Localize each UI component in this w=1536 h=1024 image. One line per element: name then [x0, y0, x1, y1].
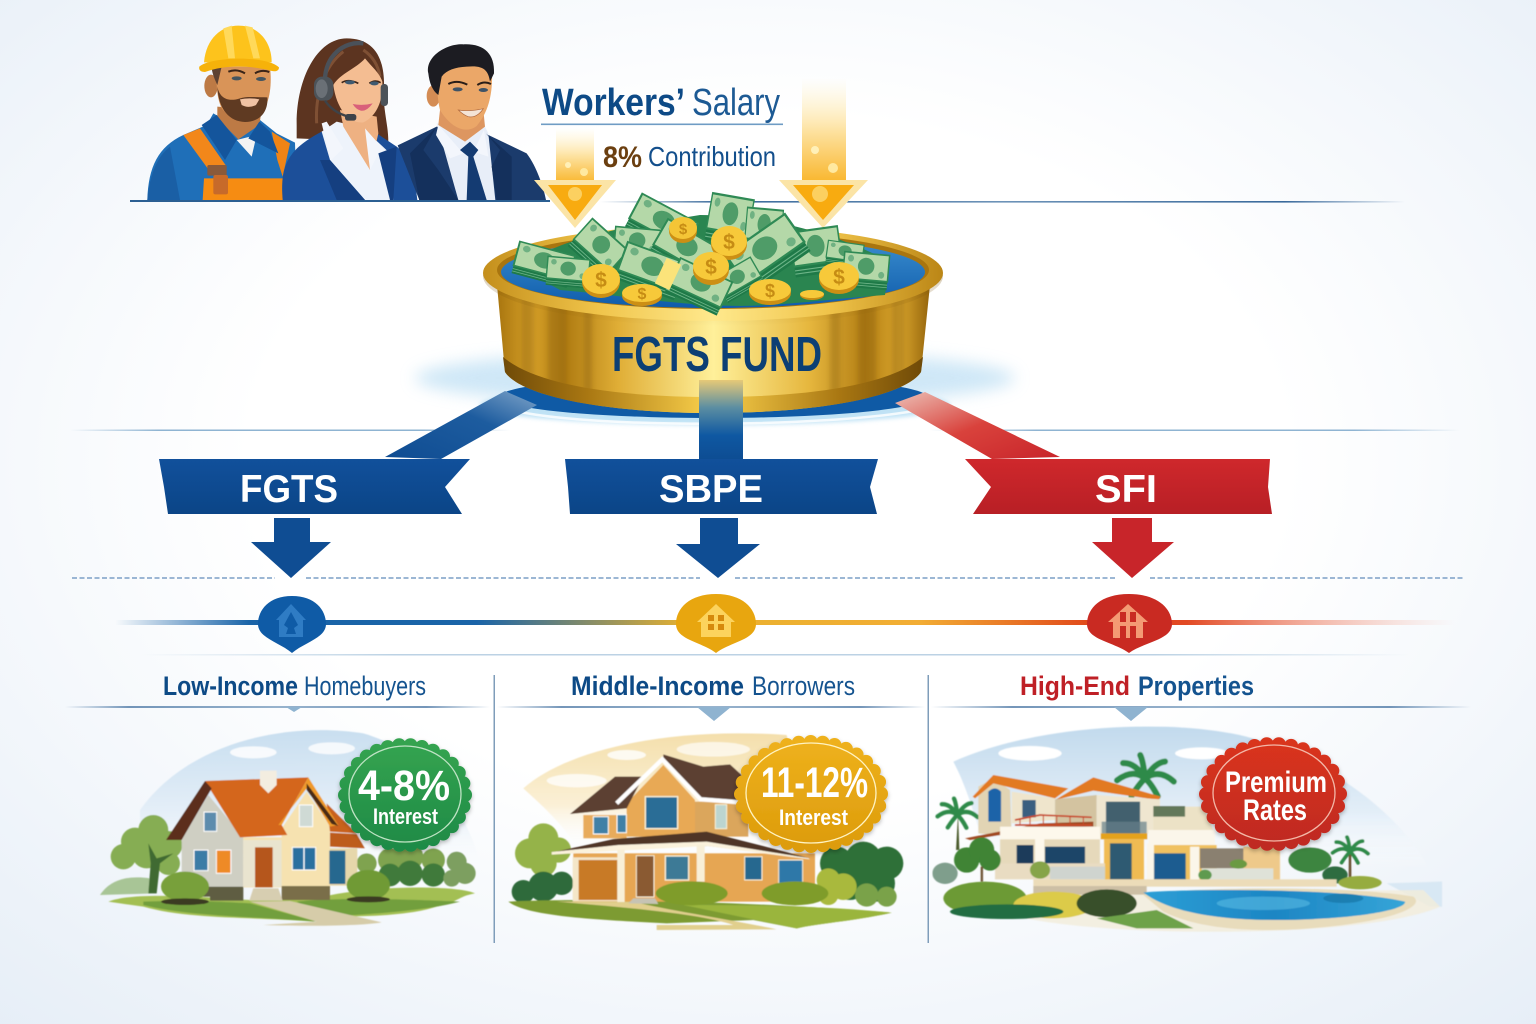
badge: premium rates: Rates — [1243, 794, 1307, 827]
money pile — [512, 193, 890, 316]
heading: high-end properties — [1020, 671, 1254, 701]
text: 8% contribution — [603, 141, 776, 174]
right gold arrow — [779, 78, 868, 228]
heading: workers' salary: Salary — [692, 82, 780, 124]
flow pipe to FGTS — [385, 391, 537, 459]
flow pipe to SFI — [895, 392, 1060, 459]
coin: $ — [705, 256, 717, 279]
heading: low-income homebuyers — [163, 671, 426, 701]
coin: $ — [723, 231, 735, 254]
FGTS fund pot — [483, 193, 943, 415]
coin — [582, 264, 620, 298]
pot rim — [483, 226, 943, 326]
water — [501, 236, 925, 308]
scene: family house — [508, 733, 903, 930]
scene: modest house — [100, 730, 483, 926]
heading: middle-income borrowers: Borrowers — [752, 671, 855, 701]
coin — [800, 290, 824, 300]
banner: SBPE: SBPE — [659, 468, 763, 511]
left gold arrow — [534, 128, 616, 228]
heading: workers' salary — [541, 82, 783, 125]
palm trees — [956, 813, 959, 850]
pin: low-income home — [258, 596, 326, 653]
heading: middle-income borrowers — [571, 671, 855, 701]
pin: middle-income home — [676, 594, 756, 653]
heading: low-income homebuyers: Homebuyers — [304, 671, 426, 701]
woman with headset — [282, 38, 417, 200]
coin — [711, 226, 747, 260]
heading: low-income homebuyers: Low-Income — [163, 671, 298, 701]
coin: $ — [638, 286, 647, 303]
faint rule below timeline — [140, 654, 1410, 656]
badge: 11-12% interest — [741, 742, 881, 846]
banner: SFI: SFI — [1095, 468, 1157, 511]
pin house icon — [697, 604, 735, 637]
dashed separator — [72, 577, 1465, 579]
heading: high-end properties: Properties — [1138, 671, 1254, 701]
section rules and pointers — [65, 706, 1471, 721]
text: 8% contribution: Contribution — [648, 141, 776, 172]
top rule under people — [130, 200, 1405, 203]
coin — [693, 252, 729, 285]
banner: FGTS: FGTS — [240, 468, 338, 511]
arrow down: SFI — [1092, 518, 1174, 578]
badge: 11-12% interest: 11-12% — [761, 759, 868, 807]
coin — [669, 217, 697, 243]
badge: premium rates — [1206, 744, 1340, 844]
badge: premium rates: Premium — [1225, 766, 1327, 799]
arrow down: FGTS — [251, 518, 331, 578]
badge: 11-12% interest: Interest — [779, 805, 849, 830]
badge: 4-8% interest: 4-8% — [358, 762, 450, 810]
man in suit — [398, 44, 546, 200]
coin: $ — [833, 266, 845, 289]
worker with hard hat — [147, 26, 297, 200]
coin — [749, 279, 791, 305]
pin house icon — [276, 604, 306, 637]
flow pipe to SBPE — [699, 380, 743, 459]
coin — [622, 284, 662, 306]
arrow down: SBPE — [676, 518, 760, 578]
scene: luxury villa with pool — [932, 726, 1442, 932]
pin: high-end home — [1087, 594, 1172, 653]
water ripple under fund — [415, 350, 1015, 425]
pot lower band — [503, 357, 923, 413]
label: FGTS FUND: FGTS FUND — [612, 328, 822, 382]
pot stripes — [521, 300, 905, 390]
pot body — [497, 285, 930, 413]
column dividers — [494, 675, 929, 943]
banner: FGTS — [159, 459, 470, 514]
pin house icon — [1108, 604, 1148, 638]
heading: middle-income borrowers: Middle-Income — [571, 671, 744, 701]
banner: SBPE — [565, 459, 878, 514]
coin: $ — [679, 221, 688, 238]
illustration: three workers — [147, 26, 546, 200]
badge: 4-8% interest: Interest — [373, 804, 439, 829]
badge: 4-8% interest — [345, 745, 465, 845]
coin — [819, 262, 859, 294]
timeline bar — [115, 620, 1455, 625]
coin: $ — [595, 269, 607, 292]
heading: high-end properties: High-End — [1020, 671, 1130, 701]
coin: $ — [765, 281, 775, 301]
text: 8% contribution: 8% — [603, 141, 642, 174]
faint rules beside fund — [70, 430, 1460, 431]
banner: SFI — [965, 459, 1272, 514]
heading: workers' salary: Workers’ — [542, 82, 685, 124]
